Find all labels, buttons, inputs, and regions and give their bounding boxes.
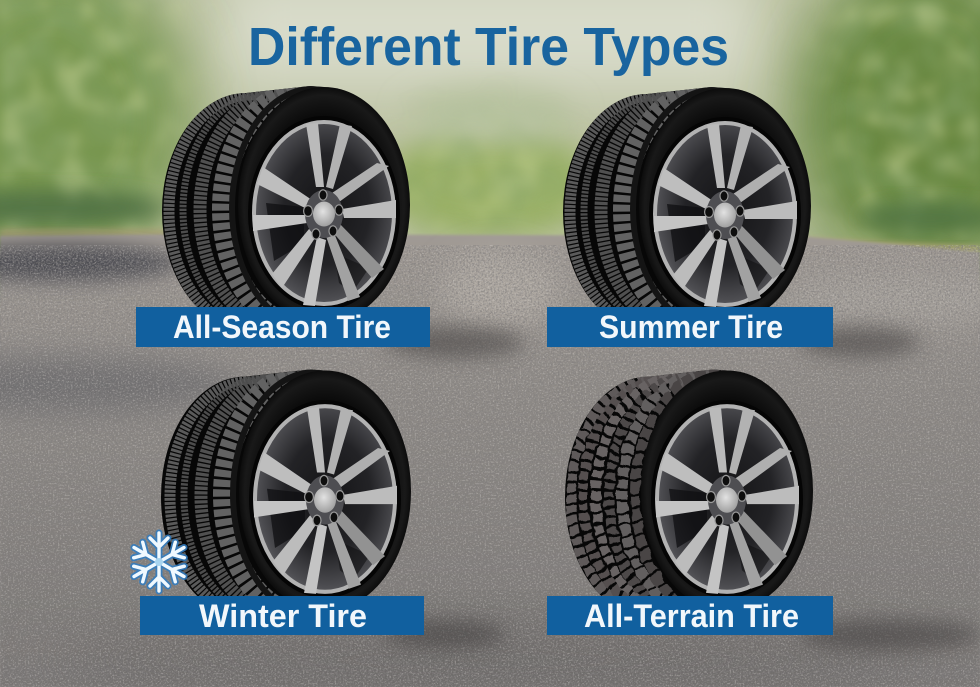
label: Winter Tire: Winter Tire [199, 598, 367, 634]
tire: winter [161, 369, 411, 617]
icon: snowflake [134, 533, 184, 591]
background: asphalt road [0, 234, 980, 687]
title: Different Tire Types [248, 17, 729, 77]
tire: summer [563, 87, 811, 330]
tire: all-terrain [565, 369, 813, 617]
label: All-Season Tire: All-Season Tire [173, 309, 391, 345]
tire: all-season [162, 86, 410, 329]
label: Summer Tire [547, 307, 833, 347]
tire shadows [385, 326, 980, 651]
label: Summer Tire: Summer Tire [599, 309, 783, 345]
label: All-Terrain Tire: All-Terrain Tire [584, 598, 799, 634]
background: blurred forest [0, 0, 980, 280]
label: Winter Tire [140, 596, 424, 635]
